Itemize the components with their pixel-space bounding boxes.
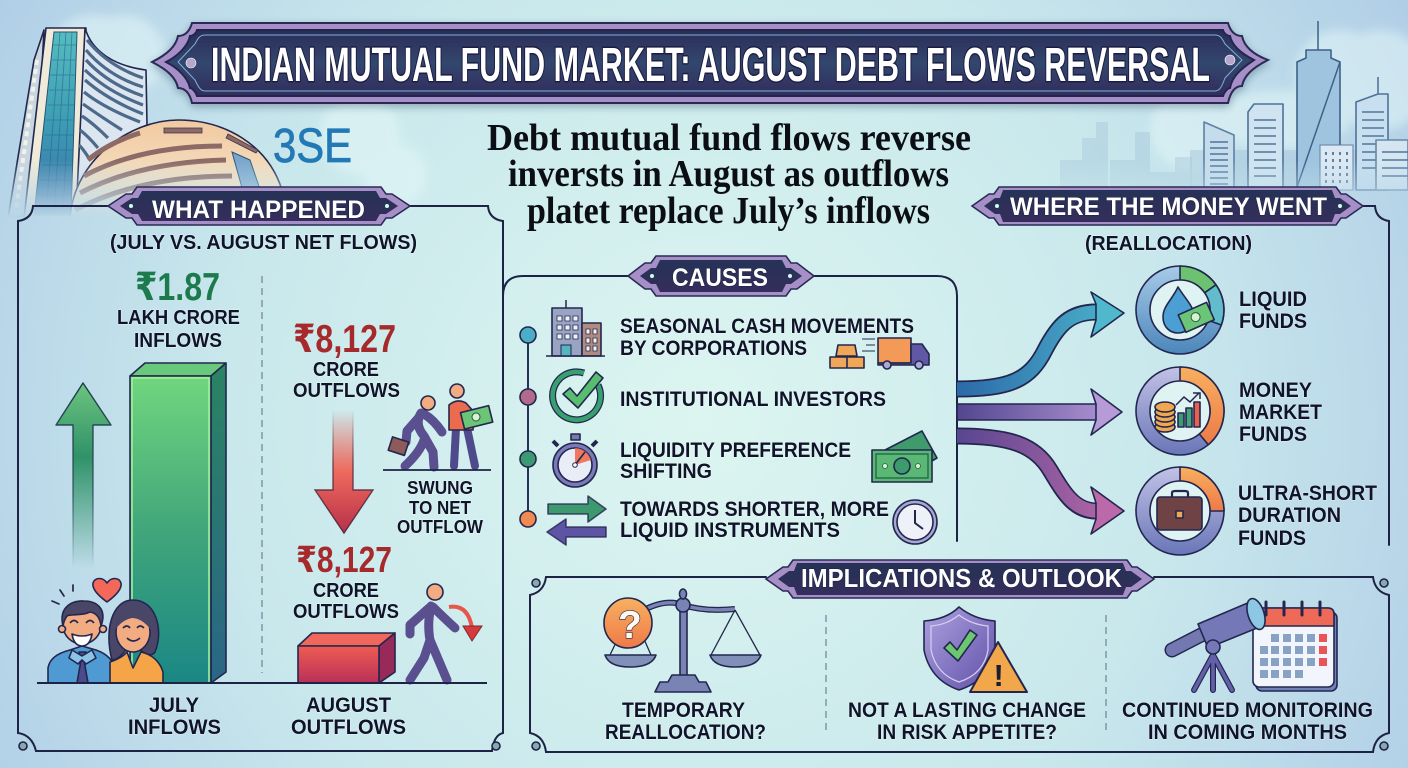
towards shorter text: LIQUID INSTRUMENTS xyxy=(620,519,840,542)
question circle xyxy=(604,598,652,648)
temporary reallocation text: TEMPORARY xyxy=(622,699,745,722)
banner inner plate xyxy=(166,30,1254,96)
subtitle: platet replace July’s inflows xyxy=(527,190,930,232)
July axis label: JULY xyxy=(149,694,199,717)
calendar xyxy=(1253,602,1337,691)
towards shorter text xyxy=(620,498,889,542)
icon: stopwatch xyxy=(553,434,597,487)
truck cab xyxy=(878,344,929,365)
icon: clock xyxy=(893,500,937,544)
striped windows xyxy=(1254,120,1276,176)
woman fringe xyxy=(115,609,151,630)
August axis label: AUGUST xyxy=(306,694,391,717)
wing louvres xyxy=(79,40,143,160)
icon: gold bars and truck xyxy=(830,338,929,369)
not a lasting change text: IN RISK APPETITE? xyxy=(877,721,1057,744)
July amount label: LAKH CRORE xyxy=(117,307,240,329)
shield inner line xyxy=(931,615,988,682)
ultra-short funds label xyxy=(1238,482,1377,550)
arrow: to money market funds xyxy=(957,389,1122,435)
tower curved wing xyxy=(76,27,148,187)
man ears xyxy=(58,626,106,632)
woman shirt xyxy=(110,652,163,683)
far right stripes xyxy=(1382,152,1408,176)
July axis label: INFLOWS xyxy=(128,716,221,739)
where the money went ribbon xyxy=(972,187,1363,225)
receiver legs xyxy=(454,428,475,466)
joy lines xyxy=(52,585,73,604)
icon: people moving money xyxy=(383,384,493,470)
telescope lens xyxy=(1243,596,1269,632)
July amount label xyxy=(117,307,240,352)
truck box xyxy=(878,338,911,363)
panel: where the money went xyxy=(957,187,1389,555)
panel: what happened xyxy=(18,187,503,751)
August amount: ₹8,127 xyxy=(293,318,396,361)
banner rivets xyxy=(186,55,1235,68)
coin stack xyxy=(1155,402,1175,432)
checkmark xyxy=(944,630,977,661)
bar chart xyxy=(1178,402,1200,427)
man tie xyxy=(77,652,88,683)
mid tower xyxy=(1204,122,1234,190)
implications ribbon: IMPLICATIONS & OUTLOOK xyxy=(801,563,1122,593)
receiver shirt xyxy=(449,401,474,430)
institutional investors text: INSTITUTIONAL INVESTORS xyxy=(620,388,886,411)
what happened ribbon: WHAT HAPPENED xyxy=(152,196,365,224)
right tall building xyxy=(1356,94,1388,190)
speed lines xyxy=(862,339,875,351)
falling arrow xyxy=(449,607,472,628)
shield xyxy=(924,607,995,690)
man smile xyxy=(72,634,92,646)
mid windows xyxy=(1210,142,1228,184)
continued monitoring text: CONTINUED MONITORING xyxy=(1122,699,1373,722)
icon: swap arrows xyxy=(547,496,606,545)
banner outer frame xyxy=(152,23,1268,103)
up arrow xyxy=(56,383,111,568)
panel frame xyxy=(18,206,503,751)
scale arm xyxy=(640,603,735,612)
liquidity preference text: LIQUIDITY PREFERENCE xyxy=(620,439,851,462)
truck wheels xyxy=(883,361,923,369)
swung to net outflow note xyxy=(397,478,483,537)
subtitle: inversts in August as outflows xyxy=(508,153,949,195)
divider xyxy=(825,615,827,735)
low building windows xyxy=(1326,152,1347,186)
briefcase xyxy=(1172,491,1188,498)
July green bar xyxy=(130,363,226,683)
icon: balance scale with question mark xyxy=(604,589,761,692)
city skyline illustration xyxy=(1060,21,1408,190)
title banner xyxy=(152,23,1268,103)
dome bands xyxy=(75,133,232,210)
seasonal cash text xyxy=(620,315,914,360)
walker body xyxy=(405,413,442,467)
icon: cash stack xyxy=(872,431,937,482)
seasonal cash text: BY CORPORATIONS xyxy=(620,337,807,360)
liquidity preference text: SHIFTING xyxy=(620,460,712,483)
pivot xyxy=(676,598,690,612)
swung to net outflow note: OUTFLOW xyxy=(397,517,483,537)
woman face xyxy=(116,612,150,652)
BSE logo: 3SE xyxy=(273,120,352,173)
tower side windows xyxy=(16,60,37,210)
reallocation subheading: (REALLOCATION) xyxy=(1085,233,1252,255)
August axis label xyxy=(291,694,406,739)
icon: office buildings xyxy=(546,300,605,356)
subtitle: Debt mutual fund flows reverse xyxy=(487,117,971,159)
money market funds label: FUNDS xyxy=(1239,423,1307,446)
tripod xyxy=(1194,655,1232,690)
arrow: to liquid funds xyxy=(957,292,1124,389)
warning triangle xyxy=(970,642,1027,692)
August red bar xyxy=(298,633,395,683)
tower side xyxy=(8,30,44,218)
banknote xyxy=(460,406,493,429)
second August amount: ₹8,127 xyxy=(296,539,392,580)
dome window xyxy=(231,151,260,186)
ground line xyxy=(383,469,491,471)
where the money went ribbon: WHERE THE MONEY WENT xyxy=(1010,193,1327,221)
BSE tower and dome illustration xyxy=(8,28,282,218)
woman hair back xyxy=(109,600,159,660)
ultra-short funds label: DURATION xyxy=(1238,504,1341,527)
divider xyxy=(1105,615,1107,735)
ultra-short funds label: ULTRA-SHORT xyxy=(1238,482,1377,505)
receiver head xyxy=(450,384,464,398)
back blocks xyxy=(1190,150,1355,186)
panel corner rivets xyxy=(532,579,1388,750)
banknote xyxy=(1178,302,1214,332)
August amount label: CRORE xyxy=(313,359,379,381)
faint buildings xyxy=(1060,122,1192,190)
tower front xyxy=(24,28,86,218)
tower glass strip xyxy=(34,32,77,215)
causes panel frame xyxy=(503,276,957,541)
icon: shield with warning xyxy=(924,607,1027,693)
pans xyxy=(605,655,761,667)
second August label xyxy=(293,580,399,623)
low windows building xyxy=(1320,145,1353,190)
second August label: OUTFLOWS xyxy=(293,601,399,623)
telescope eyepiece xyxy=(1172,633,1205,650)
swung to net outflow note: TO NET xyxy=(409,498,471,518)
right building stripes and spire xyxy=(1362,77,1384,168)
water drop xyxy=(1163,287,1194,333)
trend line xyxy=(1176,393,1200,405)
temporary reallocation text: REALLOCATION? xyxy=(605,721,766,744)
donut: ultra-short funds xyxy=(1136,467,1224,555)
not a lasting change text xyxy=(848,699,1086,744)
icon: walking person with arrow xyxy=(410,584,482,680)
dome small windows xyxy=(164,128,258,153)
man shirt xyxy=(48,646,115,683)
woman features xyxy=(123,626,144,641)
continued monitoring text: IN COMING MONTHS xyxy=(1148,721,1347,744)
dome xyxy=(70,120,282,218)
August amount label xyxy=(293,359,400,402)
panel subheading: (JULY VS. AUGUST NET FLOWS) xyxy=(110,232,417,254)
scale post xyxy=(680,603,687,679)
donut: money market funds xyxy=(1136,367,1224,455)
skyscraper spire xyxy=(1296,21,1340,190)
what happened ribbon xyxy=(108,187,410,225)
down arrow xyxy=(315,410,373,533)
causes ribbon: CAUSES xyxy=(672,264,768,292)
figure xyxy=(410,606,455,680)
panel: implications and outlook xyxy=(530,560,1389,752)
question mark: ? xyxy=(618,604,642,647)
man collar xyxy=(69,650,96,664)
July amount: ₹1.87 xyxy=(135,266,220,309)
liquid funds label: FUNDS xyxy=(1239,310,1307,333)
panel frame xyxy=(1363,206,1389,545)
August amount label: OUTFLOWS xyxy=(293,380,400,402)
donut: liquid funds xyxy=(1136,266,1224,354)
money market funds label: MONEY xyxy=(1239,379,1312,402)
gold bars xyxy=(830,345,864,368)
ultra-short funds label: FUNDS xyxy=(1238,527,1306,550)
panel: causes xyxy=(503,256,957,545)
not a lasting change text: NOT A LASTING CHANGE xyxy=(848,699,1086,722)
striped building xyxy=(1248,104,1283,190)
skyscraper xyxy=(1297,50,1340,190)
liquid funds label: LIQUID xyxy=(1239,288,1307,311)
liquidity preference text xyxy=(620,439,851,483)
money market funds label: MARKET xyxy=(1239,401,1322,424)
man face xyxy=(63,606,101,644)
base xyxy=(655,675,711,692)
arrow: to ultra-short funds xyxy=(957,436,1124,534)
falling arrowhead xyxy=(463,626,482,641)
causes ribbon xyxy=(628,256,814,296)
banner fine line xyxy=(178,35,1242,91)
seasonal cash text: SEASONAL CASH MOVEMENTS xyxy=(620,315,914,338)
far right building xyxy=(1376,140,1408,190)
heart xyxy=(93,578,121,602)
July amount label: INFLOWS xyxy=(134,330,222,352)
telescope barrel xyxy=(1198,602,1262,648)
money market funds label xyxy=(1239,379,1322,446)
towards shorter text: TOWARDS SHORTER, MORE xyxy=(620,498,889,521)
icon: green check circle xyxy=(553,372,603,420)
warning mark: ! xyxy=(994,658,1004,693)
walker head xyxy=(421,396,435,410)
subtitle xyxy=(487,117,971,232)
knob xyxy=(680,589,686,599)
center dashed divider xyxy=(261,276,263,673)
chart baseline xyxy=(37,682,487,684)
telescope mount xyxy=(1206,640,1220,654)
swung to net outflow note: SWUNG xyxy=(407,478,473,498)
icon: telescope and calendar xyxy=(1172,596,1337,691)
second August label: CRORE xyxy=(313,580,379,602)
July axis label xyxy=(128,694,221,739)
man eyes xyxy=(70,620,94,623)
liquid funds label xyxy=(1239,288,1307,333)
briefcase xyxy=(388,437,409,455)
right pan strings xyxy=(610,610,760,655)
man hair xyxy=(62,601,103,626)
panel corner rivets xyxy=(19,742,500,750)
August axis label: OUTFLOWS xyxy=(291,716,406,739)
continued monitoring text xyxy=(1122,699,1373,744)
background clouds xyxy=(40,15,1408,207)
panel frame xyxy=(530,577,1389,752)
temporary reallocation text xyxy=(605,699,766,744)
timeline xyxy=(520,327,536,527)
icon: happy investors xyxy=(48,578,163,683)
tripod inner xyxy=(1194,655,1232,690)
head xyxy=(427,584,443,600)
glass grid xyxy=(40,32,77,198)
